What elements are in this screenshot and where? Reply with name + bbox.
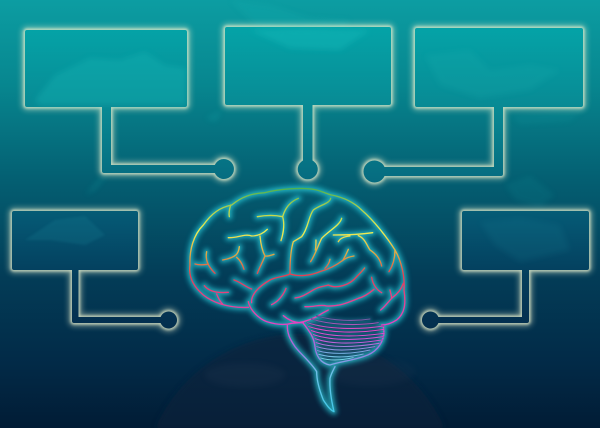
icon: brain coloured contour lines — [190, 188, 405, 412]
panel: top centre box with connector — [225, 27, 391, 179]
background cloud texture — [85, 0, 590, 208]
panel: lower left box with connector — [12, 211, 177, 328]
icon: brain glow — [190, 188, 405, 412]
planet silhouette — [156, 334, 444, 428]
panel: top left box with connector — [25, 30, 234, 179]
panel: top right box with connector — [363, 28, 583, 182]
panel: lower right box with connector — [422, 211, 589, 328]
